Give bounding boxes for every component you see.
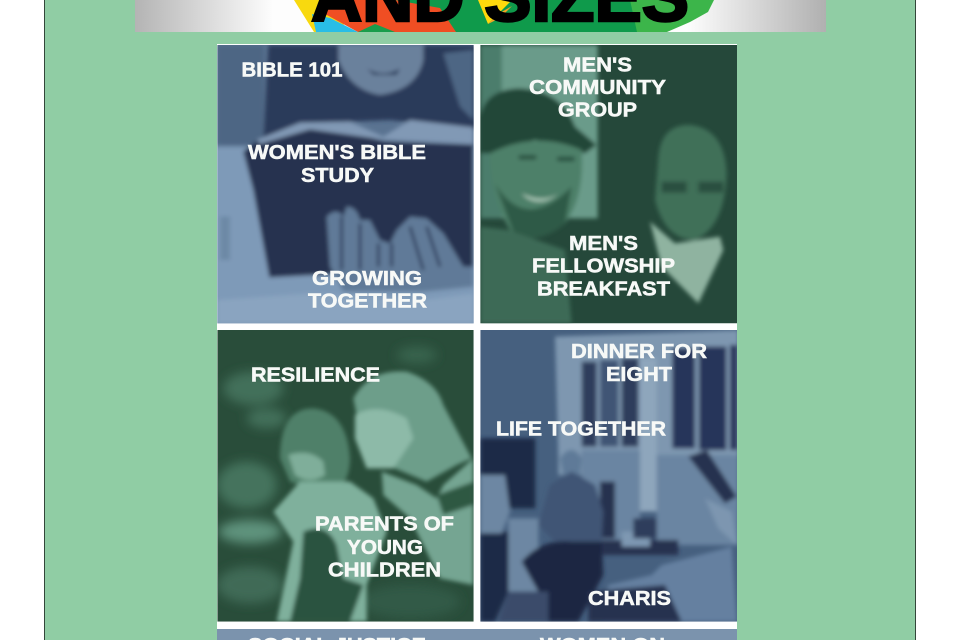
label: Resilience: RESILIENCE bbox=[251, 364, 380, 386]
label: Parents of Young Children: PARENTS OF bbox=[315, 514, 454, 536]
label: Growing Together: TOGETHER bbox=[308, 290, 428, 312]
label: Dinner for Eight bbox=[571, 341, 708, 386]
label: Men's Fellowship Breakfast: BREAKFAST bbox=[537, 278, 670, 300]
label: Men's Community Group: COMMUNITY bbox=[529, 77, 667, 99]
label: Women's Bible Study: WOMEN'S BIBLE bbox=[248, 142, 426, 164]
label: Growing Together bbox=[308, 268, 428, 312]
label: Men's Fellowship Breakfast: FELLOWSHIP bbox=[532, 256, 675, 278]
label: Charis: CHARIS bbox=[588, 588, 671, 610]
panel: children photo bbox=[217, 330, 474, 622]
label: Parents of Young Children: YOUNG bbox=[347, 537, 423, 559]
panel: living room photo bbox=[480, 330, 738, 622]
label: Dinner for Eight: EIGHT bbox=[606, 364, 672, 386]
header banner bbox=[135, 0, 826, 32]
label: Women's Bible Study bbox=[248, 142, 426, 187]
header colour splash bbox=[294, 0, 714, 32]
label: Men's Fellowship Breakfast: MEN'S bbox=[569, 233, 638, 255]
label: Parents of Young Children bbox=[315, 514, 454, 582]
label: Men's Fellowship Breakfast bbox=[532, 233, 675, 300]
label: Parents of Young Children: CHILDREN bbox=[328, 560, 441, 582]
label: Life Together: LIFE TOGETHER bbox=[496, 418, 667, 440]
label: Men's Community Group: GROUP bbox=[558, 100, 637, 122]
label: Women's Bible Study: STUDY bbox=[301, 165, 375, 187]
white photo grid backing bbox=[217, 44, 737, 640]
label: Dinner for Eight: DINNER FOR bbox=[571, 341, 708, 363]
label: Men's Community Group: MEN'S bbox=[563, 54, 632, 76]
panel: men photo bbox=[480, 45, 737, 323]
label: Men's Community Group bbox=[529, 54, 667, 122]
label: Growing Together: GROWING bbox=[312, 268, 422, 290]
label: Bible 101: BIBLE 101 bbox=[242, 60, 342, 82]
panel: Bible photo bbox=[210, 45, 477, 327]
panel: bottom photo strip bbox=[217, 629, 737, 640]
